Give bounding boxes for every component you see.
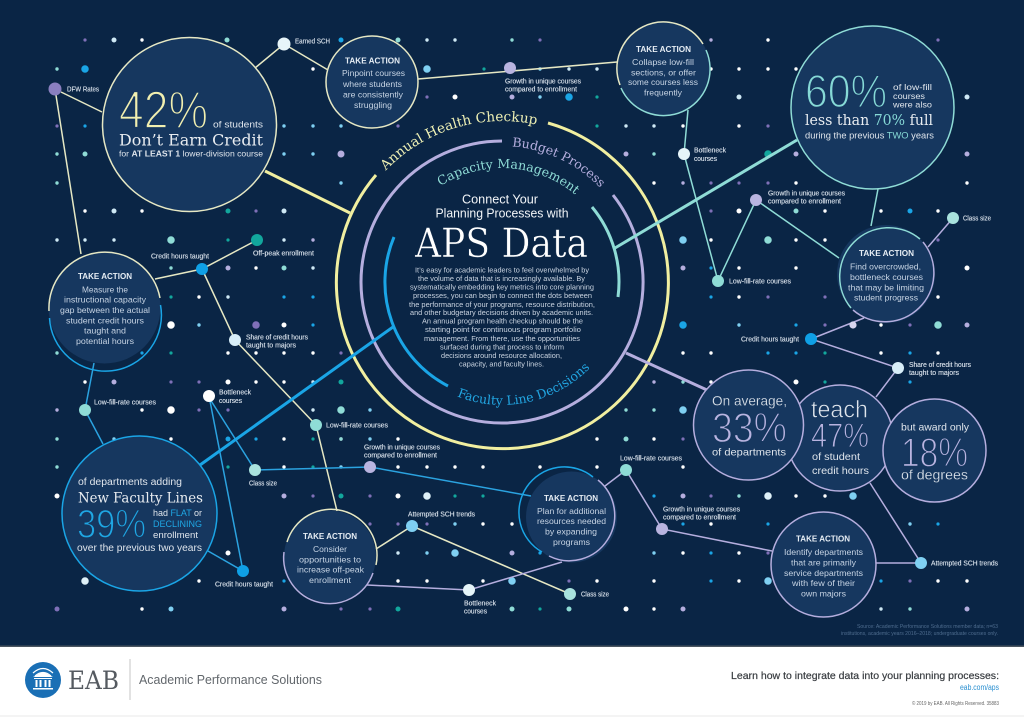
- node labels: Growth in unique courses: [663, 506, 740, 514]
- text: of low-fill courses were also: courses: [893, 91, 925, 101]
- node labels: taught to majors: [909, 370, 959, 377]
- circle outline: blue arc: [50, 305, 161, 371]
- text: of low-fill courses were also: [892, 82, 932, 110]
- node labels: Earned SCH: [295, 38, 330, 46]
- panel: but award only 18% of degrees: [883, 399, 986, 502]
- description paragraph: It’s easy for academic leaders to feel overwhelmed by: [415, 266, 589, 274]
- divider: [130, 659, 131, 700]
- concentric planning rings: [200, 123, 797, 465]
- action text: taught and: [84, 326, 126, 336]
- copyright: © 2019 by EAB. All Rights Reserved. 35883: [912, 700, 999, 707]
- node labels: Credit hours taught: [151, 254, 209, 260]
- action text: [628, 57, 698, 98]
- heading: Faculty Line Decisions: Faculty Line Decisions: [458, 364, 589, 408]
- heading: take action: TAKE ACTION: [345, 56, 400, 66]
- text: of students: of students: [213, 120, 264, 130]
- text: had flat or declining enrollment: [153, 508, 202, 541]
- node labels: Low-fill-rate courses: [94, 400, 156, 406]
- node labels: compared to enrollment: [663, 514, 736, 522]
- circle outline: lavender arc: [853, 242, 934, 322]
- text: of student credit hours: credit hours: [812, 465, 869, 477]
- action text: own majors: [801, 588, 846, 598]
- action text: opportunities to: [299, 554, 361, 564]
- network nodes: [48, 38, 959, 600]
- dot grid background: [57, 40, 967, 609]
- action text: Plan for additional: [537, 506, 606, 516]
- action text: sections, or offer: [631, 68, 696, 78]
- stat: 39%: 39%: [77, 503, 146, 547]
- link: eab.com/aps: eab.com/aps: [960, 683, 999, 692]
- action text: bottleneck courses: [850, 272, 923, 282]
- logo wordmark: EAB: EAB: [68, 666, 119, 695]
- text: during the previous two years: during the previous TWO years: [805, 131, 935, 141]
- stat: 33%: 33%: [712, 404, 787, 451]
- node labels: Bottleneck: [694, 148, 726, 154]
- heading: take action: TAKE ACTION: [859, 248, 914, 258]
- panel: take action identify departments: [771, 512, 876, 617]
- thick arrow: 42% stat to annual health checkup: [265, 171, 350, 213]
- node labels: Growth in unique courses: [364, 444, 440, 452]
- description paragraph: capacity, and faculty lines.: [459, 360, 544, 368]
- ring: annual health checkup: [336, 123, 668, 449]
- action text: [784, 547, 863, 598]
- action text: that are primarily: [791, 558, 857, 568]
- text: of low-fill courses were also: of low-fill: [893, 82, 932, 92]
- description paragraph: the performance of your programs, resource distribution,: [409, 300, 595, 309]
- node labels: Class size: [249, 480, 277, 488]
- description paragraph: surfaced during that process to inform: [440, 342, 564, 352]
- text: of departments: of departments: [712, 447, 786, 459]
- ring: capacity management: [592, 207, 619, 297]
- action text: programs: [553, 537, 590, 547]
- source note: institutions, academic years 2016–2018; undergraduate courses only.: [841, 631, 998, 637]
- action text: that may be limiting: [848, 282, 924, 292]
- node labels: compared to enrollment: [768, 198, 841, 206]
- text: had flat or declining enrollment: DECLINING: [153, 519, 202, 530]
- node labels: Class size: [581, 592, 609, 598]
- heading: take action: TAKE ACTION: [796, 534, 850, 544]
- action text: enrollment: [309, 575, 352, 585]
- description paragraph: systematically embedding key metrics into core planning: [410, 282, 594, 292]
- connector lines between nodes: [55, 44, 953, 594]
- circle outline: cream arc: [617, 22, 703, 85]
- action text: Identify departments: [784, 547, 863, 557]
- description paragraph: starting point for continuous program portfolio: [425, 325, 581, 334]
- text: on average: On average,: [712, 393, 787, 409]
- description paragraph: [409, 266, 595, 368]
- heading: Budget Process: Budget Process: [512, 137, 604, 187]
- action text: Find overcrowded,: [850, 262, 921, 272]
- node labels: Bottleneck: [219, 390, 251, 396]
- ring: budget process: [361, 141, 643, 423]
- panel: take action find overcrowded courses: [837, 225, 935, 323]
- node labels: Class size: [963, 216, 991, 222]
- stat: 18%: 18%: [901, 430, 968, 476]
- panel: 39% of departments adding new faculty lines: [62, 436, 217, 591]
- node labels: Low-fill-rate courses: [326, 422, 388, 430]
- action text: service departments: [784, 568, 863, 578]
- circle outline: blue arc: [519, 467, 593, 552]
- text: of student credit hours: [812, 451, 869, 477]
- panel: 60% of low-fill courses: [791, 26, 954, 189]
- curved ring headings: [382, 111, 604, 408]
- ring: faculty line decisions: [385, 237, 448, 386]
- panel: take action increase off-peak enrollment: [284, 509, 377, 604]
- action text: some courses less: [628, 77, 698, 87]
- node labels: Growth in unique courses: [505, 78, 581, 86]
- action text: instructional capacity: [64, 294, 147, 304]
- description paragraph: decisions around resource allocation,: [441, 351, 562, 360]
- action text: Consider: [313, 544, 347, 554]
- heading: Annual Health Checkup: Annual Health Checkup: [382, 111, 537, 171]
- stat: 42%: 42%: [119, 81, 208, 140]
- text: new faculty lines: New Faculty Lines: [78, 490, 203, 506]
- action text: with few of their: [791, 578, 855, 588]
- text: of low-fill courses were also: were also: [892, 100, 932, 110]
- text: but award only: but award only: [901, 422, 970, 434]
- text: had flat or declining enrollment: had FLAT or: [153, 508, 202, 519]
- text: had flat or declining enrollment: enrollment: [153, 530, 198, 541]
- node labels: Low-fill-rate courses: [620, 456, 682, 462]
- stat: 60%: 60%: [805, 65, 887, 117]
- panel: take action collapse low-fill sections: [617, 22, 710, 116]
- action text: [342, 68, 405, 110]
- heading: Capacity Management: Capacity Management: [438, 158, 579, 194]
- source note: Source: Academic Performance Solutions member data; n=63: [857, 624, 998, 630]
- action text: are consistently: [343, 90, 404, 100]
- action text: [297, 544, 365, 585]
- description paragraph: management. From there, use the opportunities: [424, 334, 580, 343]
- action text: student progress: [854, 292, 918, 302]
- node labels: Share of credit hours: [909, 362, 971, 369]
- action text: [848, 262, 924, 302]
- action text: struggling: [354, 100, 392, 110]
- action text: by expanding: [545, 526, 597, 536]
- title: APS Data: APS Data: [414, 221, 588, 267]
- node labels: courses: [219, 398, 242, 405]
- circle outline: lavender arc: [284, 552, 373, 604]
- node labels: courses: [694, 156, 717, 163]
- title: connect your planning processes: Planning Processes with: [436, 206, 569, 220]
- action text: [60, 284, 150, 346]
- thick arrow: 60% stat to capacity management: [615, 140, 797, 248]
- panel: on average 33% of departments: [694, 370, 804, 480]
- heading: take action: TAKE ACTION: [78, 271, 132, 281]
- node labels: [67, 38, 998, 616]
- thick arrow: departments stat to budget process: [626, 353, 707, 390]
- circle outline: teal arc: [840, 228, 920, 308]
- description paragraph: processes, you can begin to connect the dots between: [413, 291, 592, 300]
- text: of departments adding: of departments adding: [78, 477, 182, 488]
- description paragraph: the volume of data that is increasingly available. By: [418, 274, 585, 283]
- text: over the previous two years: over the previous two years: [77, 543, 202, 554]
- circle outline: lavender arc: [549, 480, 615, 561]
- action text: potential hours: [76, 336, 134, 346]
- icon: EAB logo: [25, 662, 61, 698]
- text: don't earn credit: Don’t Earn Credit: [119, 132, 264, 150]
- stat: 47%: 47%: [811, 417, 869, 455]
- node labels: Attempted SCH trends: [408, 512, 475, 518]
- text: of student credit hours: of student: [812, 451, 860, 463]
- title: connect your planning processes: [436, 192, 569, 220]
- node labels: DFW Rates: [67, 86, 99, 94]
- heading: take action: TAKE ACTION: [303, 531, 357, 541]
- circle outline: cream arc: [287, 509, 377, 565]
- central title and description: [409, 192, 595, 368]
- text: teach: teach: [811, 397, 868, 424]
- node labels: Credit hours taught: [741, 336, 799, 344]
- heading: take action: TAKE ACTION: [636, 44, 691, 54]
- node labels: compared to enrollment: [505, 86, 577, 94]
- title: connect your planning processes: Connect Your: [462, 192, 538, 206]
- node labels: Attempted SCH trends: [931, 560, 998, 568]
- action text: gap between the actual: [60, 305, 150, 315]
- panel: 42% don't earn credit: [102, 38, 276, 212]
- panel: take action plan for additional resources: [519, 467, 617, 562]
- action text: student credit hours: [66, 316, 144, 326]
- text: for at least 1 lower-division course: for AT LEAST 1 lower-division course: [119, 148, 263, 158]
- panel: teach 47% of student credit hours: [787, 385, 893, 491]
- action text: Pinpoint courses: [342, 68, 405, 78]
- node labels: Off-peak enrollment: [253, 250, 314, 258]
- node labels: Share of credit hours: [246, 334, 308, 342]
- description paragraph: An annual program health checkup should be the: [422, 316, 583, 326]
- action text: Collapse low-fill: [632, 57, 694, 67]
- node labels: taught to majors: [246, 342, 296, 350]
- action text: where students: [342, 79, 402, 89]
- call to action: Learn how to integrate data into your planning processes:: [731, 670, 999, 682]
- circle outline: cream arc: [49, 252, 160, 311]
- node labels: Low-fill-rate courses: [729, 278, 791, 286]
- panel: take action pinpoint courses: [326, 36, 418, 128]
- action text: Measure the: [82, 284, 128, 294]
- action text: resources needed: [537, 516, 606, 526]
- node labels: courses: [464, 608, 487, 616]
- footer band: [0, 646, 1024, 717]
- thick arrow: 39% stat to faculty line decisions: [200, 327, 393, 465]
- text: of degrees: of degrees: [901, 466, 968, 482]
- action text: increase off-peak: [297, 564, 365, 574]
- text: academic performance solutions: Academic Performance Solutions: [139, 673, 322, 687]
- node labels: Growth in unique courses: [768, 190, 845, 198]
- description paragraph: and other budgetary decisions driven by academic units.: [410, 308, 593, 317]
- circle outline: teal arc: [621, 50, 710, 116]
- action text: frequently: [644, 88, 683, 98]
- source note: [841, 624, 998, 637]
- node labels: Bottleneck: [464, 600, 496, 608]
- node labels: compared to enrollment: [364, 452, 437, 460]
- node labels: Credit hours taught: [215, 582, 273, 588]
- action text: [537, 506, 606, 547]
- heading: take action: TAKE ACTION: [544, 493, 598, 503]
- text: less than 70% full: less than 70% full: [805, 113, 933, 129]
- panel: take action measure instructional capacity: [48, 252, 161, 371]
